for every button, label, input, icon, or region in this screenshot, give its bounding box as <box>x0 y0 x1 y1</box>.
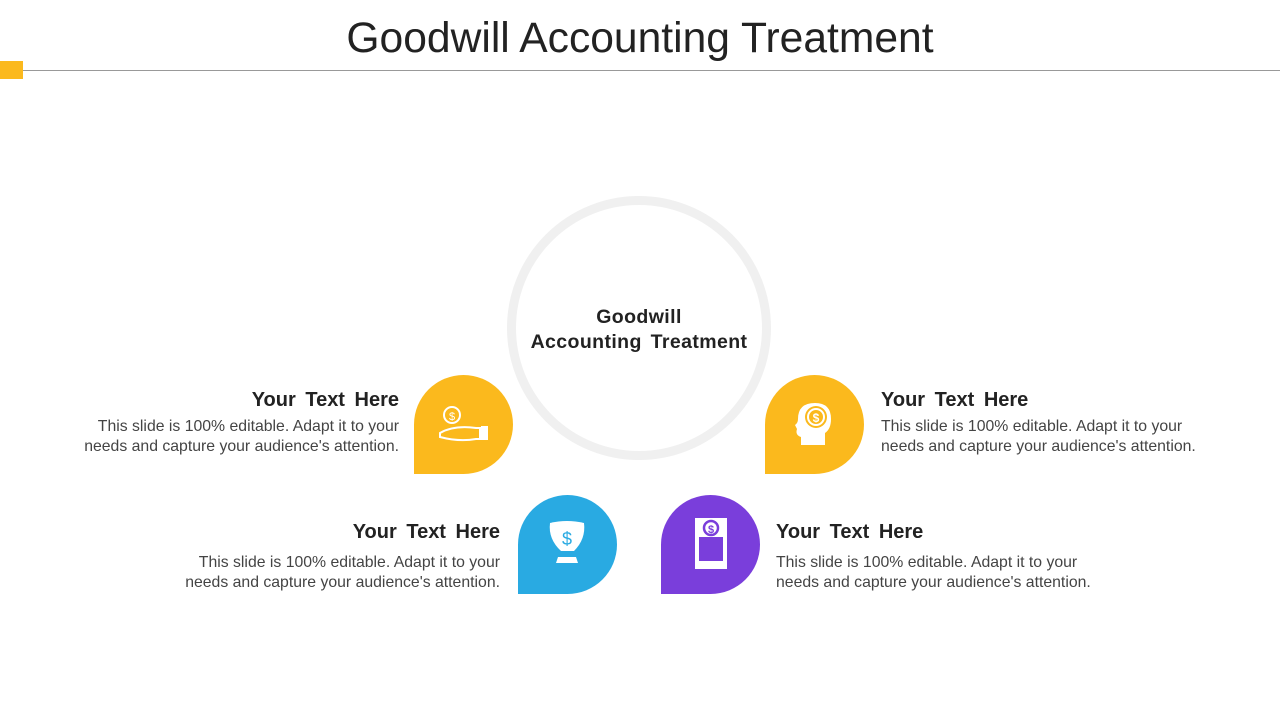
center label: Goodwill <box>596 306 682 328</box>
text: needs and capture your audience's attention. <box>881 438 1196 454</box>
text <box>881 418 1196 454</box>
item: top-left <box>84 375 513 474</box>
text: This slide is 100% editable. Adapt it to your <box>881 418 1182 435</box>
central ring <box>507 196 771 460</box>
text: This slide is 100% editable. Adapt it to your <box>776 554 1077 571</box>
text: This slide is 100% editable. Adapt it to your <box>98 418 399 435</box>
text <box>84 418 399 454</box>
heading: Your Text Here <box>776 521 923 543</box>
text <box>776 554 1091 590</box>
heading: Your Text Here <box>881 389 1028 411</box>
icon: hand with coin: $ <box>449 411 455 423</box>
title underline accent <box>0 61 1280 79</box>
text: needs and capture your audience's attention. <box>185 574 500 590</box>
icon: head with coin: $ <box>813 411 820 425</box>
icon: hand with coin <box>414 375 513 474</box>
heading: Your Text Here <box>252 389 399 411</box>
icon: head with coin <box>765 375 864 474</box>
title: Goodwill Accounting Treatment <box>346 14 934 62</box>
icon: money bag <box>518 495 617 594</box>
item: bottom-right <box>661 495 1091 594</box>
item: bottom-left <box>185 495 617 594</box>
icon: money bag: $ <box>562 529 572 549</box>
icon: banknote: $ <box>708 524 714 536</box>
text: This slide is 100% editable. Adapt it to your <box>199 554 500 571</box>
text: needs and capture your audience's attention. <box>84 438 399 454</box>
item: top-right <box>765 375 1196 474</box>
icon: banknote <box>661 495 760 594</box>
text: needs and capture your audience's attention. <box>776 574 1091 590</box>
text <box>185 554 500 590</box>
heading: Your Text Here <box>353 521 500 543</box>
center label <box>531 306 747 353</box>
center label: Accounting Treatment <box>531 331 747 353</box>
